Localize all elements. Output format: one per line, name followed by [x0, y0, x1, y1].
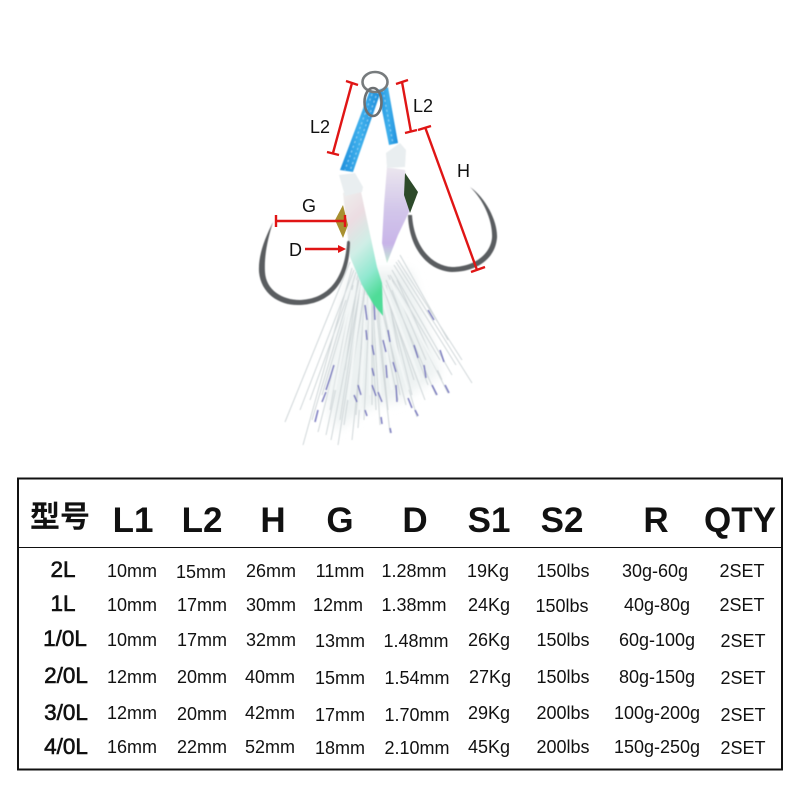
- row: 3/0L: 12mm: [107, 703, 157, 723]
- row: 1/0L: 32mm: [246, 630, 296, 650]
- header row: G: [326, 501, 354, 540]
- row: 2/0L: 40mm: [245, 667, 295, 687]
- row: 3/0L: 29Kg: [468, 703, 510, 723]
- row: 1/0L: 13mm: [315, 631, 365, 651]
- ring: top: [362, 72, 388, 92]
- row: 2/0L: 80g-150g: [619, 667, 695, 687]
- row: 3/0L: 1.70mm: [384, 705, 450, 725]
- table: size specifications: [18, 478, 782, 770]
- row: 1/0L: 2SET: [720, 631, 766, 651]
- hook: left: [259, 222, 350, 305]
- header row: D: [402, 501, 428, 540]
- thread wrap: right: [386, 143, 406, 168]
- row: 3/0L: [44, 700, 766, 725]
- row: 1/0L: 1.48mm: [383, 631, 449, 651]
- row: 1/0L: 60g-100g: [619, 630, 695, 650]
- row: 2/0L: 15mm: [315, 668, 365, 688]
- header row: L2: [182, 501, 222, 540]
- blue rope: left: [340, 90, 380, 172]
- row: 3/0L: 2SET: [720, 705, 766, 725]
- row: 3/0L: 3/0L: [44, 700, 88, 725]
- table frame: [18, 478, 782, 770]
- row: 2/0L: 150lbs: [536, 667, 590, 687]
- dimension: G: [276, 196, 345, 227]
- row: 4/0L: 45Kg: [468, 737, 510, 757]
- row: 2L: 2L: [50, 557, 76, 582]
- dimension: G: G: [302, 196, 316, 216]
- header row: R: [643, 501, 669, 540]
- header row: S2: [541, 501, 583, 540]
- foil: right: [382, 167, 410, 263]
- dimension: H: H: [457, 161, 470, 181]
- row: 4/0L: 4/0L: [44, 734, 88, 759]
- gold diamond: [335, 205, 348, 238]
- row: 1L: 1.38mm: [381, 595, 447, 615]
- row: 2L: 2SET: [719, 561, 765, 581]
- row: 1/0L: 10mm: [107, 630, 157, 650]
- dimension: D arrow: D: [289, 240, 302, 260]
- row: 1L: 12mm: [313, 595, 363, 615]
- row: 2L: 150lbs: [536, 561, 590, 581]
- row: 1L: 30mm: [246, 595, 296, 615]
- row: 1/0L: 17mm: [177, 630, 227, 650]
- dimension: L2 right: L2: [413, 96, 433, 116]
- row: 1L: 10mm: [107, 595, 157, 615]
- row: 1/0L: 150lbs: [536, 630, 590, 650]
- row: 2L: 10mm: [107, 561, 157, 581]
- row: 4/0L: 18mm: [315, 738, 365, 758]
- thread wrap: left: [339, 173, 363, 196]
- ring: lower: [364, 88, 382, 116]
- row: 4/0L: [44, 734, 766, 759]
- row: 1L: 1L: [50, 591, 76, 616]
- header row: S1: [468, 501, 510, 540]
- row: 4/0L: 200lbs: [536, 737, 590, 757]
- header row: 型号: [30, 501, 90, 534]
- header row: H: [260, 501, 286, 540]
- row: 3/0L: 42mm: [245, 703, 295, 723]
- row: 3/0L: 20mm: [177, 704, 227, 724]
- dimension: L2 left: L2: [310, 117, 330, 137]
- row: 1L: 17mm: [177, 595, 227, 615]
- row: 2L: 15mm: [176, 562, 226, 582]
- tinsel skirt: [285, 255, 472, 445]
- row: 1L: 40g-80g: [624, 595, 690, 615]
- row: 2/0L: 20mm: [177, 667, 227, 687]
- row: 4/0L: 16mm: [107, 737, 157, 757]
- header divider: [18, 546, 782, 548]
- row: 1/0L: 1/0L: [43, 626, 87, 651]
- row: 4/0L: 2.10mm: [384, 738, 450, 758]
- blue rope: right: [378, 87, 398, 145]
- row: 4/0L: 2SET: [720, 738, 766, 758]
- row: 2/0L: 12mm: [107, 667, 157, 687]
- row: 4/0L: 52mm: [245, 737, 295, 757]
- row: 2L: 30g-60g: [622, 561, 688, 581]
- row: 2/0L: 27Kg: [469, 667, 511, 687]
- row: 2/0L: 2/0L: [44, 663, 88, 688]
- row: 4/0L: 22mm: [177, 737, 227, 757]
- dimension: L2 left: [310, 81, 358, 155]
- row: 1L: 150lbs: [535, 596, 589, 616]
- dimension: H: [418, 126, 485, 272]
- header row: QTY: [704, 501, 776, 540]
- row: 1L: 2SET: [719, 595, 765, 615]
- row: 3/0L: 100g-200g: [614, 703, 700, 723]
- row: 1/0L: [43, 626, 766, 651]
- dimension: D arrow: [289, 240, 346, 260]
- row: 1L: [50, 591, 765, 616]
- hook: right: [408, 187, 497, 272]
- row: 3/0L: 17mm: [315, 705, 365, 725]
- green diamond: [404, 173, 418, 213]
- row: 2/0L: 1.54mm: [384, 668, 450, 688]
- row: 2L: [50, 557, 765, 582]
- illustration: assist hook product photo: [259, 72, 497, 445]
- foil: left: [343, 187, 383, 316]
- header row: [30, 501, 776, 540]
- row: 2L: 1.28mm: [381, 561, 447, 581]
- row: 4/0L: 150g-250g: [614, 737, 700, 757]
- row: 2L: 19Kg: [467, 561, 509, 581]
- row: 3/0L: 200lbs: [536, 703, 590, 723]
- dimension: L2 right: [396, 80, 433, 133]
- row: 2L: 26mm: [246, 561, 296, 581]
- row: 1/0L: 26Kg: [468, 630, 510, 650]
- header row: L1: [113, 501, 153, 540]
- row: 2L: 11mm: [316, 561, 364, 581]
- row: 2/0L: [44, 663, 766, 688]
- row: 1L: 24Kg: [468, 595, 510, 615]
- row: 2/0L: 2SET: [720, 668, 766, 688]
